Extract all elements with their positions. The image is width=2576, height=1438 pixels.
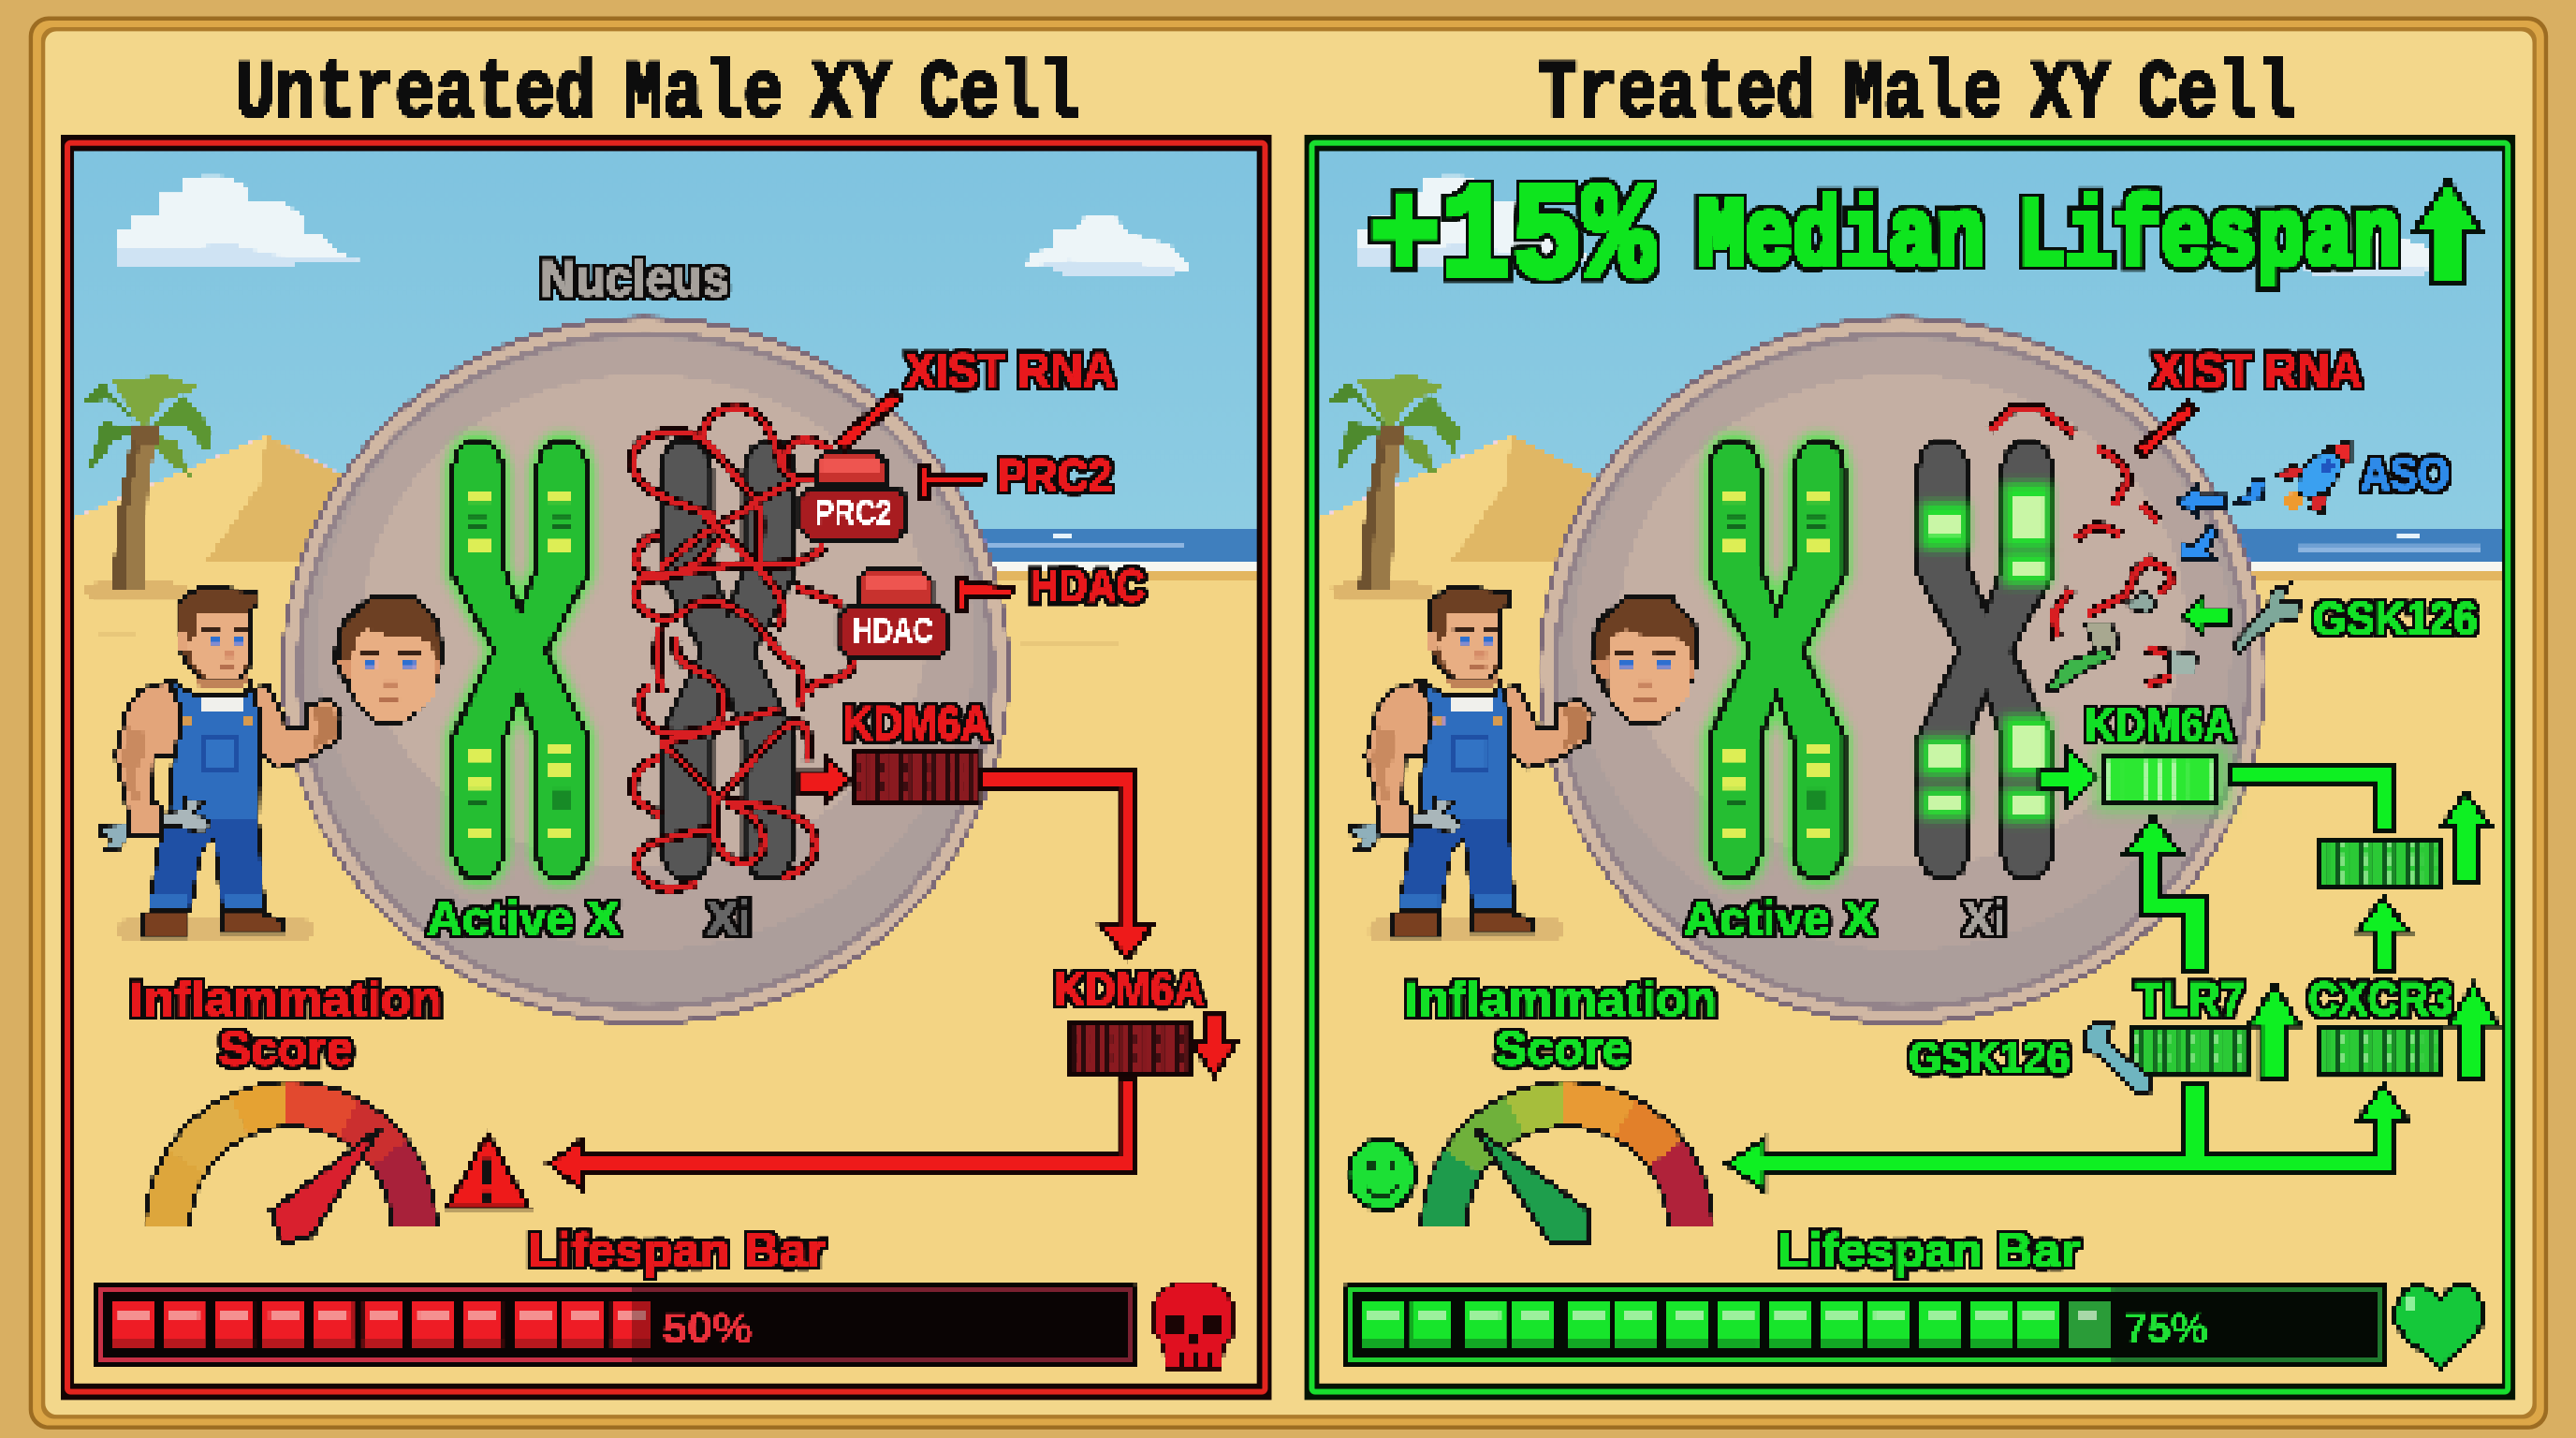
bar segments [112, 1303, 652, 1347]
label: XIST RNA: XIST RNA [905, 344, 1116, 399]
icon: smiley [1348, 1139, 1415, 1211]
label: KDM6A low: KDM6A [1055, 962, 1204, 1016]
nucleus [281, 315, 1010, 1025]
heading: inflammation score [130, 973, 442, 1075]
character: man in overalls [1350, 587, 1592, 942]
wrench: green [2046, 623, 2120, 692]
gauge: high inflammation [168, 1104, 414, 1244]
chromosome: active X [1709, 440, 1844, 879]
reactivated gene glows [1922, 483, 2051, 822]
arrow: ASO blue down [2181, 524, 2217, 560]
label: TLR7: TLR7 [2136, 973, 2244, 1026]
protein: PRC2 [800, 453, 907, 539]
arrow: lifespan up [2413, 179, 2482, 283]
icon: cloud left [118, 176, 359, 268]
character: face [334, 596, 444, 725]
protein: HDAC [838, 570, 949, 657]
title: untreated: Untreated Male XY Cell [235, 47, 1079, 142]
label: HDAC: HDAC [1030, 561, 1145, 611]
border: treated green [1305, 135, 2515, 1400]
bar value: 50% [662, 1304, 753, 1352]
XIST RNA fragments, wrenches and ASO attack [1989, 408, 2350, 692]
chromosome: reactivated Xi [1918, 440, 2053, 879]
arrow: CXCR3 up [2448, 984, 2499, 1078]
title: treated: Treated Male XY Cell [1538, 47, 2297, 142]
scene: sky and beach [1316, 148, 2506, 1387]
label: active X: Active X [1684, 892, 1876, 946]
label: CXCR3: CXCR3 [2308, 973, 2452, 1026]
gene box: KDM6A reduced [1071, 1022, 1190, 1073]
label: XIST RNA: XIST RNA [2152, 344, 2363, 399]
label: PRC2: PRC2 [997, 451, 1112, 502]
scene: sky and beach [70, 148, 1260, 1387]
gauge needle [271, 1127, 381, 1244]
arrow: KDM6A down path [979, 769, 1153, 960]
chromosome: inactive Xi [661, 440, 795, 879]
label: GSK126: GSK126 [2313, 594, 2478, 644]
label: KDM6A nuclear: KDM6A [842, 697, 990, 750]
wrench: GSK126 [2232, 584, 2301, 652]
label: Xi: Xi [707, 892, 751, 946]
arrow: upper up [2441, 792, 2491, 884]
nucleus label: Nucleus [540, 250, 729, 307]
arrow: GSK126 left [2181, 597, 2232, 636]
icon: palm tree [79, 374, 213, 601]
inhibition T-bar: HDAC [958, 580, 1014, 609]
icon: palm tree [1325, 374, 1460, 601]
arrow: to inflammation [549, 1079, 1135, 1191]
label: KDM6A nuclear: KDM6A [2085, 698, 2234, 752]
callout: lifespan gain [1368, 162, 2400, 318]
callout: lifespan gain: +15% [1368, 162, 1655, 318]
character: face [1589, 596, 1699, 725]
label: GSK126 lower: GSK126 [1909, 1034, 2070, 1083]
inhibition line: XIST [2136, 403, 2197, 457]
heading: lifespan bar: Lifespan Bar [527, 1224, 827, 1277]
labels: treated panel [1368, 162, 2478, 1352]
arrow: CXCR3 to box [2358, 897, 2408, 971]
icon: warning triangle [446, 1134, 529, 1208]
gauge needle [1473, 1127, 1587, 1244]
arrow: ASO small [2234, 479, 2265, 504]
heading: inflammation score [1405, 973, 1717, 1075]
gauge: low inflammation [1444, 1104, 1690, 1244]
chromosome: active X [453, 440, 587, 879]
label: active X: Active X [427, 892, 620, 946]
icon: cloud right [2274, 215, 2443, 278]
lifespan bar 50% [94, 1284, 1137, 1369]
XIST fragments [1989, 408, 2174, 685]
gene box glow [2095, 746, 2230, 812]
bar value: 75% [2124, 1304, 2208, 1352]
label: Xi: Xi [1963, 892, 2006, 946]
lifespan bar 75% [1344, 1284, 2387, 1369]
gene box: KDM6A [856, 753, 978, 803]
wrench: GSK126 lower [2083, 1022, 2152, 1093]
inhibition line: XIST [835, 391, 902, 450]
arrow: KDM6A to box [2230, 764, 2392, 829]
heading: inflammation score: Inflammation [1405, 973, 1717, 1026]
arrow into gene [800, 755, 851, 805]
gene box: upper [2320, 841, 2440, 888]
gene box: CXCR3 [2320, 1029, 2440, 1077]
icon: heart [2395, 1284, 2482, 1369]
panel: untreated cell [70, 148, 1260, 1387]
labels: untreated panel [130, 250, 1204, 1352]
bar segments [1362, 1303, 2110, 1347]
callout: lifespan gain: Median Lifespan [1697, 183, 2400, 295]
arrow: reduced expression [1190, 1016, 1238, 1077]
arrow: TLR7 to KDM6A [2126, 816, 2206, 971]
gene box: TLR7 [2132, 1029, 2249, 1077]
heading: inflammation score: Inflammation [130, 973, 442, 1026]
inhibition T-bar: PRC2 [920, 465, 986, 498]
arrow: to inflammation [1727, 1084, 2408, 1191]
character: man in overalls [100, 587, 342, 942]
broken pieces [2127, 591, 2159, 613]
panel: treated cell [1316, 148, 2506, 1387]
XIST RNA tangle [633, 407, 853, 889]
icon: cloud right [1022, 215, 1191, 278]
arrow: TLR7 up [2249, 984, 2300, 1078]
PRC2 protein text: PRC2 [815, 493, 892, 532]
icon: cloud left [1358, 176, 1599, 268]
gene box: KDM6A active [2103, 755, 2217, 803]
arrow: ASO blue left [2176, 486, 2226, 517]
heading: inflammation score: Score [218, 1021, 353, 1075]
label: ASO: ASO [2361, 449, 2450, 500]
border: untreated red [61, 135, 1271, 1400]
HDAC protein text: HDAC [853, 611, 933, 650]
icon: rocket [2276, 441, 2350, 513]
heading: inflammation score: Score [1495, 1021, 1630, 1075]
arrow into gene [2041, 748, 2098, 807]
heading: lifespan bar: Lifespan Bar [1778, 1224, 2080, 1277]
nucleus [1538, 315, 2267, 1025]
icon: skull [1153, 1284, 1234, 1369]
